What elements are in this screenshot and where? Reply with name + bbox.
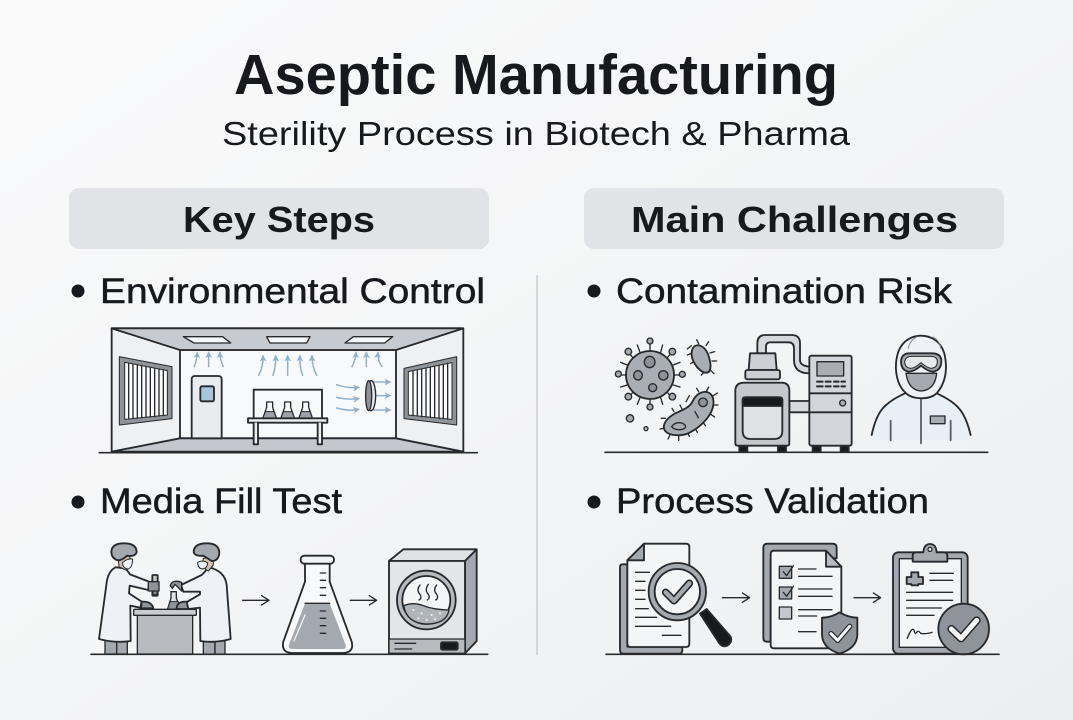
virus <box>615 338 685 431</box>
illustration: process validation workflow <box>606 544 999 654</box>
right operator <box>170 543 231 654</box>
right window <box>404 357 457 425</box>
illustration: contamination sources <box>605 335 988 452</box>
table with flasks <box>248 390 327 444</box>
checklist with shield <box>763 544 857 654</box>
illustration: media fill workflow <box>91 543 488 654</box>
ceiling <box>112 328 463 350</box>
arrow <box>722 593 750 602</box>
airflow arrows <box>194 353 390 410</box>
clipboard with approval <box>893 544 989 654</box>
illustration: cleanroom with airflow <box>99 328 477 453</box>
heading: Main Challenges <box>584 188 1004 249</box>
left window <box>119 357 172 425</box>
document under magnifier <box>620 544 731 654</box>
workbench <box>134 592 196 654</box>
bullet: Contamination Risk: Contamination Risk <box>616 272 953 311</box>
title: Aseptic Manufacturing <box>234 43 838 107</box>
bullet: Media Fill Test: Media Fill Test <box>100 482 342 521</box>
large bacterium <box>660 387 718 440</box>
rod bacterium <box>687 340 717 375</box>
bullet: Process Validation: Process Validation <box>616 482 929 521</box>
media flask <box>283 556 352 653</box>
heading: Key Steps: Key Steps <box>183 199 375 240</box>
arrow <box>350 596 377 605</box>
ceiling lights <box>183 337 393 343</box>
wall vent <box>366 381 376 411</box>
person in sterile suit <box>872 336 971 443</box>
heading: Main Challenges: Main Challenges <box>631 199 958 240</box>
incubator <box>389 549 477 653</box>
subtitle: Sterility Process in Biotech & Pharma <box>222 115 851 152</box>
arrow <box>243 596 269 605</box>
floor <box>112 438 463 452</box>
left operator <box>99 543 159 654</box>
bullet: Environmental Control: Environmental Control <box>100 272 485 311</box>
arrow <box>854 593 881 602</box>
door <box>192 376 222 438</box>
heading: Key Steps <box>69 188 489 249</box>
isolator machine <box>735 335 852 452</box>
